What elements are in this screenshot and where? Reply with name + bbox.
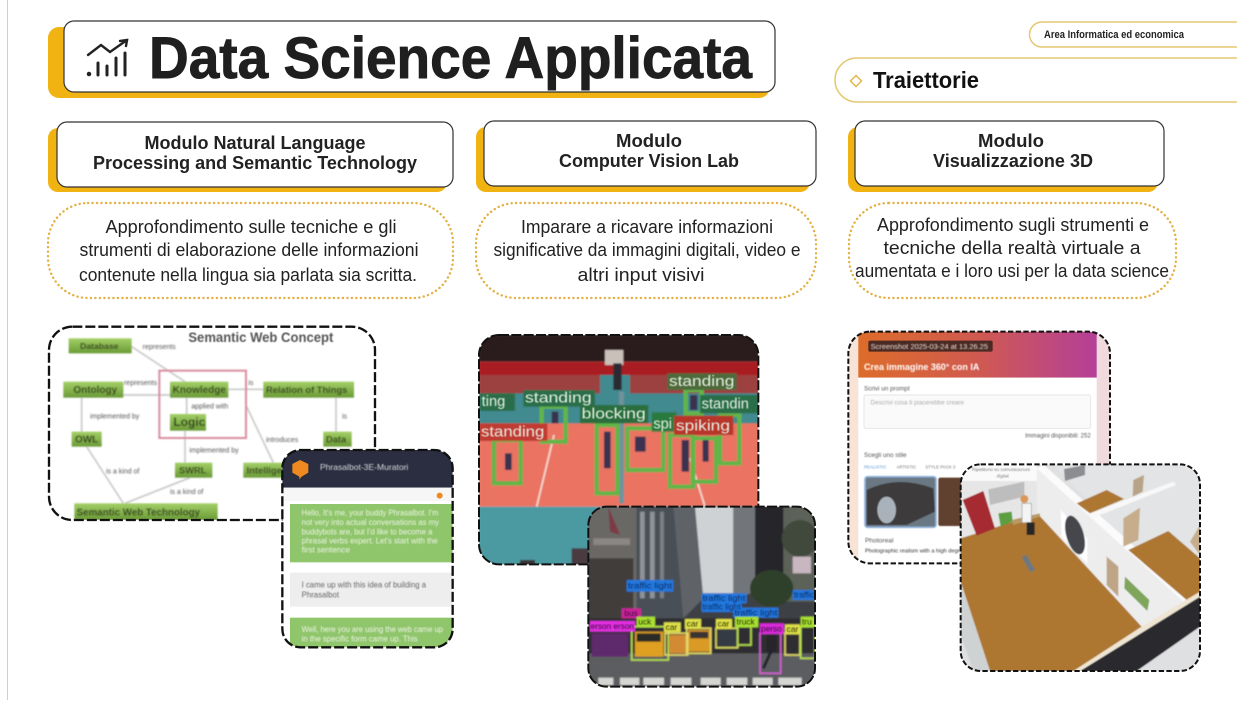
image: volleyball action detection: standin bbox=[702, 397, 749, 413]
description: 3D: tecniche della realtà virtuale a bbox=[884, 238, 1142, 258]
image: street object detection: bus bbox=[624, 608, 638, 618]
tag: Area Informatica ed economica bbox=[1030, 22, 1237, 47]
chatbot screenshot: Well, here you are using the web came up bbox=[302, 625, 444, 634]
description: NLP: strumenti di elaborazione delle informazioni bbox=[80, 240, 418, 260]
image: street object detection: traffic light bbox=[735, 607, 778, 617]
module heading: Computer Vision: Computer Vision Lab bbox=[559, 150, 739, 171]
image: street object detection: car bbox=[787, 624, 798, 634]
image: street object detection: erson erson bbox=[591, 621, 634, 631]
panel: 3D visualisation images bbox=[848, 332, 1200, 671]
diagram: Semantic Web Concept: implemented by bbox=[90, 414, 140, 421]
chatbot screenshot: phrasal verbs expert. Let's start with the bbox=[302, 537, 438, 546]
tag: Area Informatica ed economica: Area Informatica ed economica bbox=[1044, 29, 1185, 41]
image: street object detection: traffic light bbox=[703, 602, 741, 612]
panel: semantic web and chatbot images bbox=[49, 327, 453, 647]
screenshot: Crea immagine 360 con IA: Scrivi un prompt bbox=[864, 386, 910, 393]
diagram: Semantic Web Concept: Data bbox=[326, 434, 347, 444]
image: street object detection: car bbox=[718, 619, 729, 629]
diagram: Semantic Web Concept: represents bbox=[124, 380, 158, 387]
chatbot screenshot: I came up with this idea of building a bbox=[302, 581, 427, 590]
image: 3D virtual room: digital bbox=[997, 474, 1009, 479]
image: street object detection bbox=[588, 507, 818, 687]
image: street object detection: truck bbox=[737, 617, 756, 627]
diagram: Semantic Web Concept: Logic bbox=[173, 415, 206, 429]
screenshot: Crea immagine 360 con IA: Crea immagine 360° con IA bbox=[864, 362, 980, 372]
diagram: Semantic Web Concept: SWRL bbox=[179, 465, 207, 475]
diagram: Semantic Web Concept: Semantic Web Concept bbox=[188, 330, 334, 345]
screenshot: Crea immagine 360 con IA: Scegli uno stile bbox=[864, 452, 907, 459]
screenshot: Crea immagine 360 con IA: STYLE PACK 3 bbox=[925, 465, 956, 470]
description: Computer Vision: Imparare a ricavare informazioni bbox=[521, 217, 773, 237]
diagram: Semantic Web Concept: applied with bbox=[191, 403, 228, 410]
image: volleyball action detection: standing bbox=[669, 374, 734, 390]
chatbot screenshot bbox=[282, 450, 453, 647]
image: street object detection: uck bbox=[638, 616, 652, 626]
title banner bbox=[48, 21, 775, 98]
module heading: 3D: Modulo bbox=[978, 130, 1044, 151]
screenshot: Crea immagine 360 con IA: REALISTIC bbox=[864, 465, 886, 470]
image: volleyball action detection: blocking bbox=[582, 406, 646, 422]
diagram: Semantic Web Concept: is a kind of bbox=[170, 489, 203, 496]
panel: computer vision images bbox=[479, 335, 818, 687]
chatbot screenshot: first sentence bbox=[302, 546, 351, 555]
image: street object detection: traffic bbox=[794, 589, 814, 599]
image: 3D virtual room bbox=[961, 464, 1200, 671]
module heading: 3D bbox=[848, 121, 1164, 192]
diagram: Semantic Web Concept: represents bbox=[143, 344, 176, 351]
diagram: Semantic Web Concept: is bbox=[342, 414, 348, 421]
image: street object detection: traffic light bbox=[628, 580, 673, 590]
icon: chart with trend line bbox=[88, 40, 127, 75]
screenshot: Crea immagine 360 con IA: Photoreal bbox=[865, 537, 894, 544]
module heading: NLP: Processing and Semantic Technology bbox=[93, 152, 418, 173]
module heading: Computer Vision: Modulo bbox=[616, 130, 682, 151]
image: street object detection: car bbox=[687, 619, 698, 629]
diagram: Semantic Web Concept: Semantic Web Technology bbox=[77, 508, 200, 519]
image: volleyball action detection: spiking bbox=[676, 418, 730, 434]
chatbot screenshot: in the specific form came up. This bbox=[302, 634, 418, 643]
screenshot: Crea immagine 360 con IA: Descrivi cosa ti piacerebbe creare bbox=[871, 399, 964, 406]
description: Computer Vision: significative da immagini digitali, video e bbox=[494, 240, 800, 260]
diagram: Semantic Web Concept bbox=[49, 327, 375, 520]
module heading: Computer Vision bbox=[476, 121, 816, 192]
diagram: Semantic Web Concept: Relation of Things bbox=[266, 385, 347, 395]
diagram: Semantic Web Concept: Intelligent bbox=[247, 465, 291, 475]
description: NLP: contenute nella lingua sia parlata sia scritta. bbox=[79, 265, 417, 285]
tag: Traiettorie: Traiettorie bbox=[873, 67, 979, 93]
chatbot screenshot: Phrasalbot-3E-Muratori bbox=[320, 462, 408, 472]
screenshot: Crea immagine 360 con IA: Photographic realism with a high degree bbox=[865, 548, 966, 554]
description: Computer Vision: altri input visivi bbox=[578, 265, 704, 285]
image: volleyball action detection: spi bbox=[653, 416, 672, 432]
description: 3D bbox=[849, 203, 1176, 298]
image: volleyball action detection bbox=[479, 335, 758, 565]
image: street object detection: perso bbox=[761, 623, 782, 633]
diagram: Semantic Web Concept: Ontology bbox=[73, 385, 118, 396]
description: NLP bbox=[48, 203, 453, 298]
description: Computer Vision bbox=[476, 203, 816, 298]
image: 3D virtual room: Ripetitorio su comunicazioni bbox=[972, 467, 1030, 472]
module heading: NLP: Modulo Natural Language bbox=[144, 132, 366, 153]
diagram: Semantic Web Concept: is a kind of bbox=[106, 468, 139, 475]
image: street object detection: tru bbox=[802, 617, 812, 627]
description: 3D: aumentata e i loro usi per la data science bbox=[855, 261, 1169, 281]
image: street object detection: car bbox=[666, 622, 677, 632]
diagram: Semantic Web Concept: is bbox=[248, 380, 254, 387]
screenshot: Crea immagine 360 con IA bbox=[848, 332, 1110, 563]
chatbot screenshot: not very into actual conversations as my bbox=[302, 518, 439, 527]
tag: Traiettorie bbox=[835, 58, 1237, 102]
description: NLP: Approfondimento sulle tecniche e gli bbox=[106, 217, 396, 237]
screenshot: Crea immagine 360 con IA: ARTISTIC bbox=[897, 465, 916, 470]
diagram: Semantic Web Concept: Database bbox=[80, 341, 119, 351]
icon: diamond bbox=[850, 76, 862, 86]
diagram: Semantic Web Concept: implemented by bbox=[189, 448, 239, 455]
description: 3D: Approfondimento sugli strumenti e bbox=[877, 215, 1149, 235]
image: volleyball action detection: standing bbox=[481, 425, 544, 441]
image: volleyball action detection: ting bbox=[482, 394, 505, 410]
heading: Data Science Applicata: Data Science Applicata bbox=[149, 26, 753, 91]
diagram: Semantic Web Concept: Knowledge bbox=[173, 385, 226, 396]
module heading: NLP bbox=[48, 122, 453, 192]
chatbot screenshot: Phrasalbot bbox=[302, 590, 340, 599]
screenshot: Crea immagine 360 con IA: Screenshot 2025-03-24 at 13.26.25 bbox=[871, 344, 988, 351]
image: volleyball action detection: standing bbox=[525, 391, 592, 407]
image: street object detection: traffic light bbox=[703, 593, 746, 603]
screenshot: Crea immagine 360 con IA: Immagini disponibili: 252 bbox=[1025, 434, 1091, 440]
diagram: Semantic Web Concept: OWL bbox=[75, 434, 98, 445]
chatbot screenshot: Hello, It's me, your buddy Phrasalbot. I'm bbox=[302, 509, 439, 518]
chatbot screenshot: buddybots are, but I'd like to become a bbox=[302, 527, 433, 536]
module heading: 3D: Visualizzazione 3D bbox=[933, 150, 1093, 171]
diagram: Semantic Web Concept: introduces bbox=[266, 437, 299, 444]
